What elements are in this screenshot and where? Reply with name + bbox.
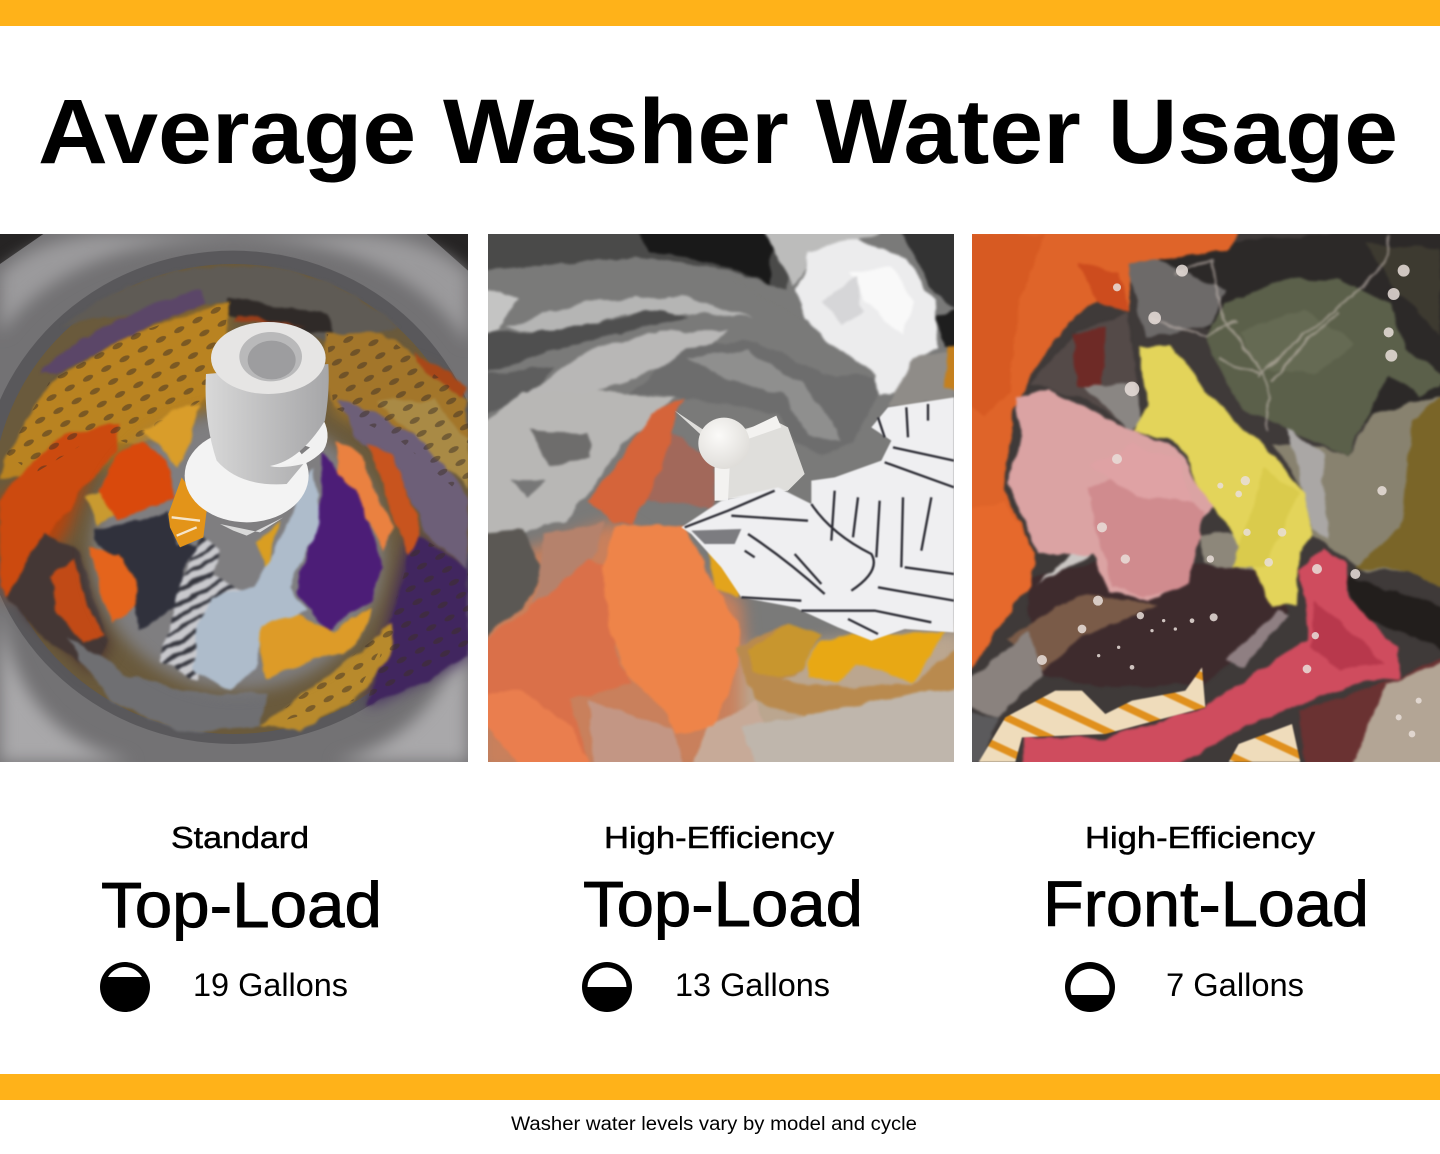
photo: high-efficiency front-load washer: [962, 224, 1440, 774]
clothes pile: [87, 404, 422, 691]
striped garment: [681, 397, 954, 641]
icon: water level medium: [582, 962, 632, 1012]
photo: high-efficiency top-load washer: [478, 224, 965, 774]
wash basket floor: [92, 411, 385, 691]
water droplets: [1037, 265, 1422, 737]
subheading: High-Efficiency: High-Efficiency: [1085, 820, 1316, 855]
striped garment: [979, 667, 1300, 762]
heading: Front-Load: Front-Load: [1043, 868, 1369, 940]
agitator: [185, 322, 329, 536]
title: Average Washer Water Usage: [38, 81, 1398, 183]
agitator: [675, 411, 805, 501]
subheading: High-Efficiency: High-Efficiency: [604, 820, 835, 855]
labels: high-efficiency top-load: [582, 820, 863, 1012]
labels: high-efficiency front-load: [1043, 820, 1369, 1012]
labels: standard top-load: [100, 820, 382, 1012]
value: 19 gallons: 19 Gallons: [193, 967, 348, 1003]
underpainting: [478, 521, 965, 774]
heading: Top-Load: Top-Load: [583, 868, 863, 940]
footnote: Washer water levels vary by model and cycle: [511, 1114, 917, 1135]
top banner: [0, 0, 1440, 26]
water splash: [1152, 234, 1389, 431]
icon: water level high: [100, 962, 150, 1012]
photo: standard top-load washer drum: [0, 234, 487, 762]
subheading: Standard: Standard: [171, 820, 309, 855]
value: 7 gallons: 7 Gallons: [1166, 967, 1304, 1003]
icon: water level low: [1065, 962, 1115, 1012]
heading: Top-Load: Top-Load: [101, 869, 382, 941]
value: 13 gallons: 13 Gallons: [675, 967, 830, 1003]
bottom banner: [0, 1074, 1440, 1100]
